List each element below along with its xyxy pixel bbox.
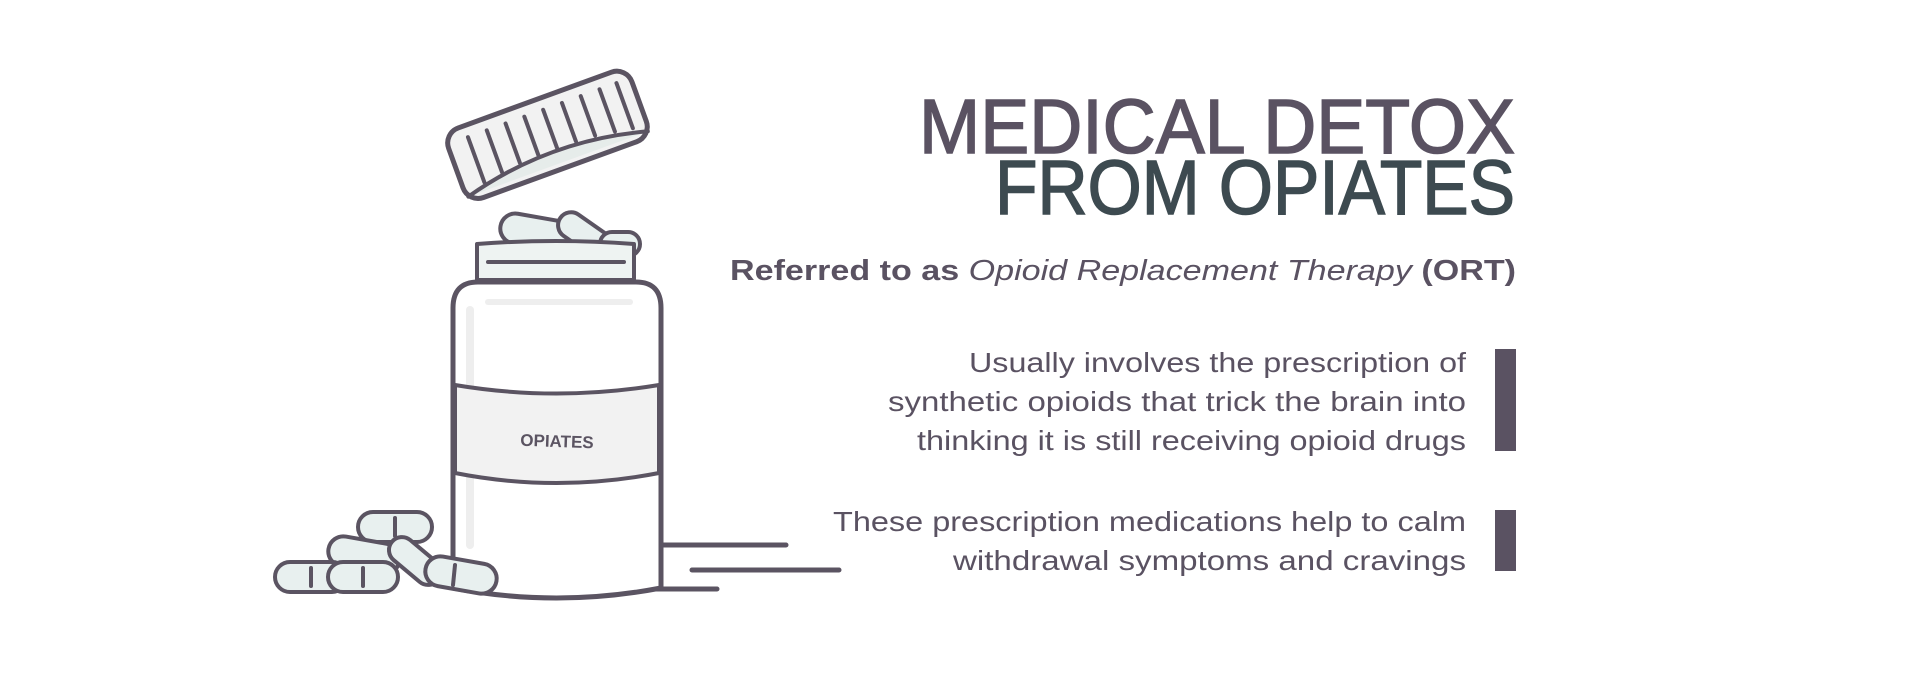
text block: bullet 2 xyxy=(833,506,1466,576)
accent bar 1 xyxy=(1495,349,1516,451)
title: MEDICAL DETOX xyxy=(919,84,1515,170)
icon: bottle lid xyxy=(443,67,652,203)
icon: pills in bottle mouth xyxy=(498,207,640,263)
text block: bullet 2: withdrawal symptoms and cravings xyxy=(952,545,1466,576)
accent bar 2 xyxy=(1495,510,1516,571)
title: FROM OPIATES xyxy=(995,145,1515,231)
subtitle: Referred to as Opioid Replacement Therapy (ORT) xyxy=(730,255,1516,287)
illustration: pill bottle xyxy=(275,67,839,598)
text block: bullet 1: synthetic opioids that trick the brain into xyxy=(888,386,1466,417)
label band xyxy=(455,385,659,483)
bottle label text: OPIATES xyxy=(520,431,594,452)
bottle body xyxy=(453,282,661,598)
text block: bullet 1: thinking it is still receiving opioid drugs xyxy=(917,425,1466,456)
bottle neck xyxy=(477,241,634,280)
title xyxy=(919,84,1515,231)
speed lines xyxy=(643,545,839,589)
text block: bullet 2: These prescription medications help to calm xyxy=(833,506,1466,537)
icon: pills pile xyxy=(275,512,499,596)
text block: bullet 1: Usually involves the prescription of xyxy=(969,347,1466,378)
text block: bullet 1 xyxy=(888,347,1466,456)
